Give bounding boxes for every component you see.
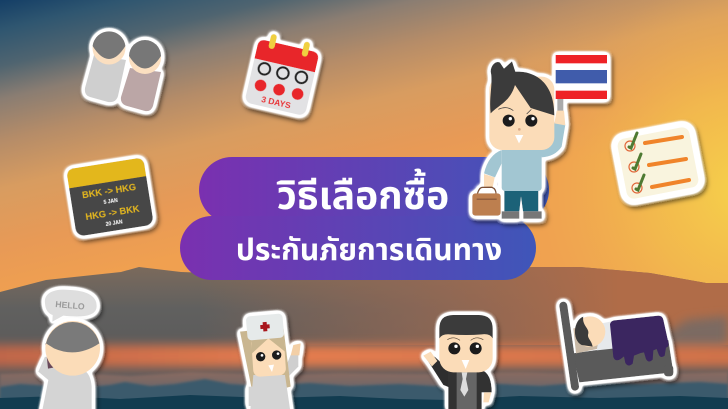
icon: calendar 3 days: 3 DAYS [260, 94, 292, 111]
title line 1: วิธีเลือกซื้อ [277, 168, 449, 218]
Thai flag [556, 55, 607, 99]
character: traveller with Thai flag [472, 55, 607, 219]
raised arm [285, 355, 298, 380]
character: person on phone with speech bubble [38, 290, 100, 409]
title banner [180, 157, 549, 280]
patient head [575, 316, 605, 347]
sheet [597, 321, 615, 350]
head [489, 77, 554, 150]
face [447, 338, 483, 369]
blanket [610, 316, 669, 366]
suitcase [477, 187, 496, 194]
background: mountains and treeline [0, 267, 728, 409]
shoes [502, 211, 519, 219]
tie [460, 372, 468, 397]
raised arm [427, 357, 452, 388]
icon: flight ticket: 20 JAN [105, 219, 123, 228]
hair [240, 327, 291, 397]
icon: flight ticket: HKG -> BKK [85, 204, 140, 222]
head [439, 315, 493, 372]
trousers [504, 190, 538, 211]
banner pill: top [199, 157, 549, 223]
face [498, 108, 537, 143]
banner pill: bottom [180, 216, 536, 280]
raised arm [540, 122, 565, 157]
icon: flight ticket [66, 157, 154, 237]
person [38, 321, 100, 409]
hair [490, 61, 554, 115]
left arm and hand [484, 150, 502, 177]
bed frame [573, 340, 673, 382]
character: nurse [240, 313, 301, 409]
icon: checklist [615, 124, 701, 202]
character: businessman [423, 315, 493, 409]
shirt [502, 148, 542, 191]
suit [448, 370, 492, 409]
icon: elderly couple [85, 31, 161, 111]
icon: flight ticket: BKK -> HKG [81, 182, 137, 200]
character: patient in bed [563, 306, 673, 387]
head [251, 336, 286, 377]
icon: calendar 3 days [244, 31, 321, 116]
speech bubble HELLO: HELLO [55, 299, 85, 312]
title line 2: ประกันภัยการเดินทาง [236, 234, 502, 267]
icon: flight ticket: 5 JAN [103, 198, 119, 206]
face [256, 350, 281, 372]
pillow [573, 325, 600, 353]
flag pole [557, 97, 563, 113]
hair [439, 315, 493, 338]
cap with red cross [246, 313, 284, 341]
body [250, 375, 291, 409]
